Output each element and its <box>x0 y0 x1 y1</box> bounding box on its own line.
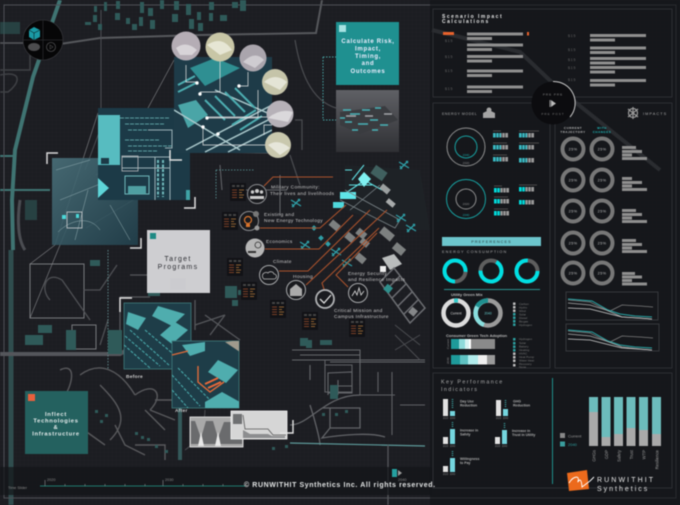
kpi: day use reduction: Day Use <box>460 400 474 404</box>
legend: utility mix: Hydrogen <box>519 323 532 327</box>
kpi year labels: 2040 <box>450 445 456 448</box>
kpi: ghg reduction: Reduction <box>513 404 530 408</box>
impact percentages: 25% <box>569 272 578 276</box>
kpi year labels: 2040 <box>450 473 456 476</box>
kpi year labels: 2020 <box>496 417 502 420</box>
donuts: energy consumption <box>444 257 538 285</box>
labels: impact categories: New Energy Technology <box>264 218 323 224</box>
panel: scenario impact calculations: $15 <box>445 55 453 59</box>
panel: scenario impact calculations: $15 <box>445 87 453 91</box>
column headings <box>560 126 611 134</box>
panel: calculate risk: Impact, <box>355 46 381 52</box>
stacked bar chart: GDP <box>604 450 609 459</box>
legend: current vs 2040: 2040 <box>568 442 578 447</box>
panel: scenario impact calculations <box>432 9 672 170</box>
legend: adoption: Solar <box>519 341 526 345</box>
labels: impact categories: Their lives and livelihoods <box>270 191 335 197</box>
stacked bar: 2040 adoption <box>446 355 495 364</box>
panel: impacts <box>555 103 672 368</box>
legend: utility mix <box>513 302 532 327</box>
right column dark overlay <box>430 0 680 505</box>
donut: 2040 mix: 2040 <box>484 312 492 316</box>
kpi: increase in trust <box>495 423 535 444</box>
stacked bar chart: GHGs <box>592 450 596 462</box>
legend: adoption: None <box>519 365 527 369</box>
legend: utility mix: Hydro <box>519 306 527 310</box>
legend: adoption: HVAC <box>519 352 528 356</box>
kpi year labels <box>443 417 509 476</box>
donut: 2040 mix <box>476 300 500 326</box>
image: campus plan <box>98 108 195 208</box>
heading: Indicators <box>441 387 478 393</box>
connector lines between zoom images <box>30 60 268 318</box>
donut: current mix: Current <box>450 312 462 316</box>
panel: scenario impact calculations: $15 <box>445 69 453 73</box>
kpi: increase in safety: Safety <box>460 432 471 436</box>
impact percentages: 25% <box>598 272 607 276</box>
stacked bar: current adoption: Current <box>446 339 450 349</box>
panel: calculate risk: and <box>362 61 374 67</box>
map: teal building clusters <box>0 0 348 453</box>
impact percentages: 25% <box>569 178 578 182</box>
impact donuts <box>562 138 612 284</box>
caption: after: After <box>175 408 188 414</box>
kpi: increase in trust: Trust in Utility <box>512 433 535 437</box>
stacked bar chart <box>589 397 661 469</box>
bottom bar <box>0 467 432 495</box>
legend: utility mix: Solar <box>519 312 526 316</box>
gauge: future <box>446 180 486 218</box>
heading <box>441 380 504 393</box>
legend: current vs 2040: Current <box>568 434 582 438</box>
panel: scenario impact calculations: $15 <box>568 78 576 82</box>
panel: target programs <box>147 230 210 293</box>
image: isometric campus with callouts <box>174 57 280 153</box>
impact bars <box>622 146 647 286</box>
icon: military community <box>248 184 266 204</box>
heading: energy consumption: ENERGY CONSUMPTION <box>442 250 507 254</box>
impact percentages: 25% <box>598 242 607 246</box>
column headings: WITH <box>597 126 607 130</box>
panel: inflect technologies: Technologies <box>33 418 79 424</box>
callout photos <box>172 32 294 158</box>
heading: Calculations <box>442 19 490 25</box>
panel: scenario impact calculations: $15 <box>568 34 576 38</box>
labels: impact categories: Housing <box>293 274 313 280</box>
heading: impacts: IMPACTS <box>643 112 667 116</box>
legend: adoption: Water Heat <box>519 358 534 362</box>
time slider: 2040 <box>398 478 406 482</box>
orange connector lines <box>260 177 387 292</box>
play control dial: PRE PRE <box>543 92 563 96</box>
kpi: day use reduction <box>443 399 477 416</box>
labels: impact categories: and Resilience Impacts <box>348 277 406 283</box>
legend: current vs 2040 <box>560 433 582 447</box>
stacked bar chart: Resilience <box>654 449 660 469</box>
heading: green tech adoption: Consumer Green Tech Adoption <box>446 333 508 338</box>
panel: inflect technologies: Infrastructure <box>32 432 80 438</box>
heading <box>442 14 503 25</box>
gauge: current <box>447 128 485 166</box>
labels: impact categories <box>264 184 406 320</box>
kpi: ghg reduction: GHG <box>513 400 521 404</box>
central building cluster <box>291 161 430 323</box>
kpi year labels: 2040 <box>502 445 508 448</box>
donut: current mix <box>444 298 468 326</box>
labels: impact categories: Critical Mission and <box>334 308 383 314</box>
labels: impact categories: Campus Infrastructure <box>334 314 389 320</box>
gauge: future: 2040 <box>463 213 470 217</box>
panel: scenario impact calculations: $15 <box>568 58 576 62</box>
labels: impact categories: Economics <box>266 239 293 245</box>
kpi: ghg reduction <box>496 400 530 416</box>
icon: housing <box>286 280 306 300</box>
panel: inflect technologies: Inflect <box>45 412 67 418</box>
impact percentages: 25% <box>569 210 578 214</box>
impact percentages: 25% <box>569 148 578 152</box>
stacked bar chart: WTP <box>642 450 646 459</box>
legend: adoption: Recovery <box>519 362 532 366</box>
legend: utility mix: Carbon <box>519 302 529 306</box>
kpi year labels: 2040 <box>450 417 456 420</box>
column headings: CHANGES <box>593 130 611 134</box>
copyright: © RUNWITHIT Synthetics Inc. All rights reserved. <box>244 481 436 489</box>
column headings: CURRENT <box>564 126 582 130</box>
icon: building <box>483 108 495 118</box>
panel: calculate risk: Calculate Risk, <box>341 39 395 45</box>
kpi: increase in trust: Increase in <box>512 429 530 433</box>
panel: scenario impact calculations: $15 <box>568 48 576 52</box>
icon: impacts globe <box>628 107 638 119</box>
time slider <box>8 469 406 490</box>
logo: RUNWITHIT Synthetics <box>567 470 655 493</box>
gauge: current: 2040 <box>463 153 470 157</box>
preferences button: PREFERENCES <box>471 240 512 244</box>
impact percentages: 25% <box>598 210 607 214</box>
panel: energy model <box>433 103 550 369</box>
gauge: current: 2020 <box>463 161 470 165</box>
kpi year labels: 2040 <box>503 417 509 420</box>
panel: scenario impact calculations: $15 <box>445 39 453 43</box>
heading: Scenario Impact <box>442 14 503 20</box>
panel: key performance indicators <box>433 373 672 488</box>
legend: adoption: Heat Pump <box>519 355 534 359</box>
image: map overview <box>47 153 141 248</box>
panel: calculate risk <box>336 22 399 152</box>
panel: inflect technologies: & <box>54 425 58 431</box>
kpi year labels: 2020 <box>443 417 449 420</box>
impact percentages: 25% <box>598 148 607 152</box>
icon: economics <box>246 238 264 258</box>
legend: adoption: Battery <box>519 344 529 348</box>
mini data tables <box>222 183 365 337</box>
kpi: day use reduction: Reduction <box>460 404 477 408</box>
labels: impact categories: Military Community: <box>271 184 320 190</box>
mini bars <box>493 131 539 216</box>
gauge: future: 2020 <box>463 202 470 206</box>
icon: critical mission <box>316 290 334 308</box>
panel: scenario impact calculations: $15 <box>568 66 576 70</box>
stacked bar chart: Safety <box>616 449 622 462</box>
kpi year labels: 2020 <box>495 445 501 448</box>
legend: utility mix: Wind <box>519 309 526 313</box>
panel: calculate risk: Timing, <box>355 54 381 60</box>
kpi year labels: 2020 <box>443 445 449 448</box>
kpi: increase in safety <box>443 422 478 444</box>
play control dial <box>532 81 575 124</box>
column headings: TRAJECTORY <box>560 130 586 134</box>
kpi: willingness to pay <box>443 451 479 472</box>
legend: utility mix: Biogas <box>519 320 529 324</box>
panel: target programs: Programs <box>158 264 198 271</box>
labels: impact categories: Existing and <box>264 212 294 218</box>
kpi: increase in safety: Increase in <box>460 428 478 432</box>
chart thumbnails <box>190 411 293 447</box>
heading: Key Performance <box>441 380 504 386</box>
icon: energy security <box>348 284 368 302</box>
stacked bar: 2040 adoption: 2040 <box>446 357 450 364</box>
time slider: 2030 <box>165 478 173 482</box>
play control dial: PRE POST <box>541 112 565 116</box>
logo: RUNWITHIT Synthetics: Synthetics <box>597 486 649 493</box>
image: before scenario <box>120 298 191 380</box>
line chart: bottom <box>566 324 659 351</box>
panel: target programs: Target <box>164 256 192 263</box>
legend: utility mix: Diesel <box>519 316 528 320</box>
legend: adoption: Heating <box>519 348 530 352</box>
kpi: willingness to pay: Willingness <box>460 457 479 461</box>
legend: adoption <box>513 337 534 369</box>
impact percentages: 25% <box>598 178 607 182</box>
labels: impact categories: Energy Security <box>348 271 387 277</box>
kpi: willingness to pay: to Pay <box>460 461 471 465</box>
heading: energy model: ENERGY MODEL <box>442 112 477 116</box>
icon: climate <box>260 266 278 284</box>
icon wheel: top-left navigation <box>23 20 63 60</box>
impact percentages: 25% <box>569 242 578 246</box>
logo: RUNWITHIT Synthetics: RUNWITHIT <box>597 477 655 484</box>
icon: energy technology <box>240 211 260 230</box>
line chart: top <box>566 292 658 320</box>
time slider: Time Slider <box>8 486 28 490</box>
kpi year labels: 2020 <box>443 473 449 476</box>
stacked bar: current adoption <box>446 339 495 349</box>
preferences button <box>442 237 541 246</box>
legend: adoption: Hydrogen <box>519 337 532 341</box>
impact percentages <box>569 148 607 276</box>
labels: impact categories: Climate <box>273 259 292 265</box>
panel: inflect technologies <box>25 391 88 454</box>
time slider: 2020 <box>47 478 55 482</box>
panel: calculate risk: Outcomes <box>351 69 385 75</box>
heading: utility green mix: Utility Green Mix <box>451 292 483 297</box>
caption: before: Before <box>126 374 143 380</box>
stacked bar chart: Trust <box>629 449 634 459</box>
image: after scenario <box>172 340 240 414</box>
